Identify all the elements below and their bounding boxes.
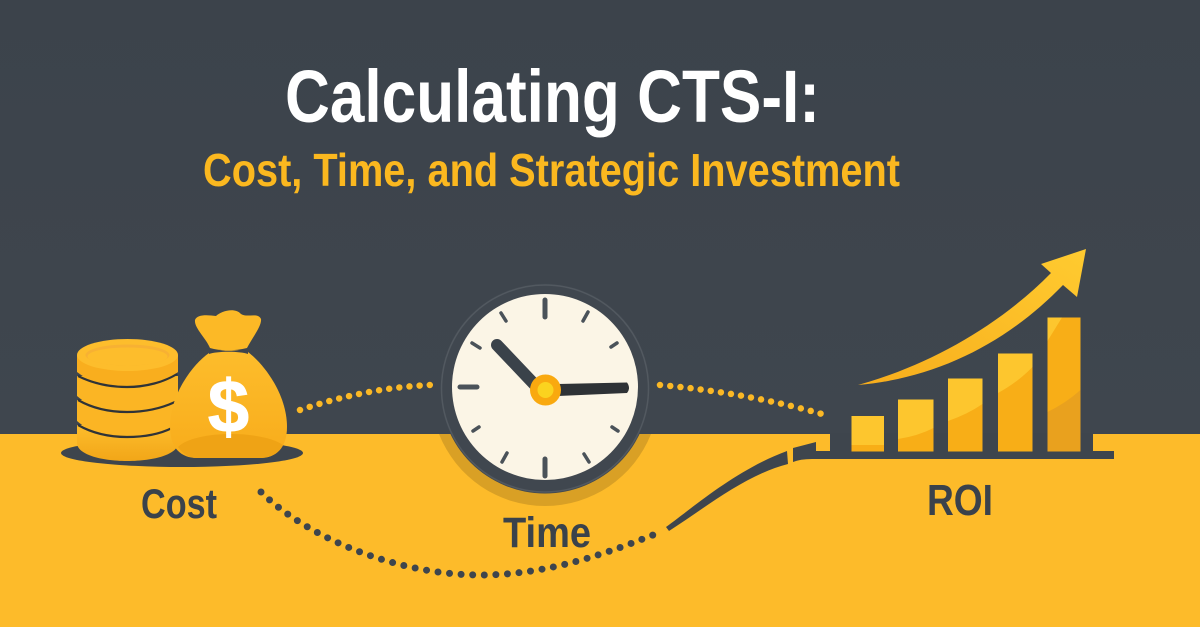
label: Cost: Cost (141, 480, 217, 527)
bar 5 (1048, 318, 1080, 452)
clock hub (530, 374, 561, 406)
arrow: upward trend (858, 249, 1086, 385)
money bag (170, 310, 287, 458)
coin stack (77, 339, 178, 461)
icon: clock (439, 284, 651, 506)
background: dark upper area (0, 0, 1200, 434)
dark baseline track and notch (666, 433, 1114, 531)
subtitle: Cost, Time, and Strategic Investment (203, 144, 900, 196)
dotted connector: lower curve from cost to ROI (261, 492, 658, 575)
dotted connector: cost to time (300, 385, 430, 410)
clock face (452, 294, 638, 480)
dotted connector: time to ROI (660, 385, 829, 416)
background: yellow lower band (0, 434, 1200, 627)
label: ROI: ROI (927, 476, 993, 525)
bar 2 (898, 400, 934, 452)
label: Time: Time (503, 509, 591, 557)
hour hand (558, 382, 629, 396)
bar chart: ROI growth (852, 318, 1080, 452)
title: Calculating CTS-I: (285, 55, 820, 138)
clock drop shadow (439, 434, 651, 506)
icon: coins and money bag (61, 310, 303, 467)
tick marks (460, 300, 618, 476)
ground shadow (61, 439, 303, 467)
minute hand (497, 345, 534, 384)
rising dark curve (666, 451, 788, 531)
clock ring (440, 284, 650, 494)
curve end segment (793, 442, 830, 462)
bar 3 (948, 378, 982, 452)
dollar sign: $ (208, 365, 249, 448)
bar 1 (852, 416, 884, 452)
bar 4 (998, 354, 1032, 452)
